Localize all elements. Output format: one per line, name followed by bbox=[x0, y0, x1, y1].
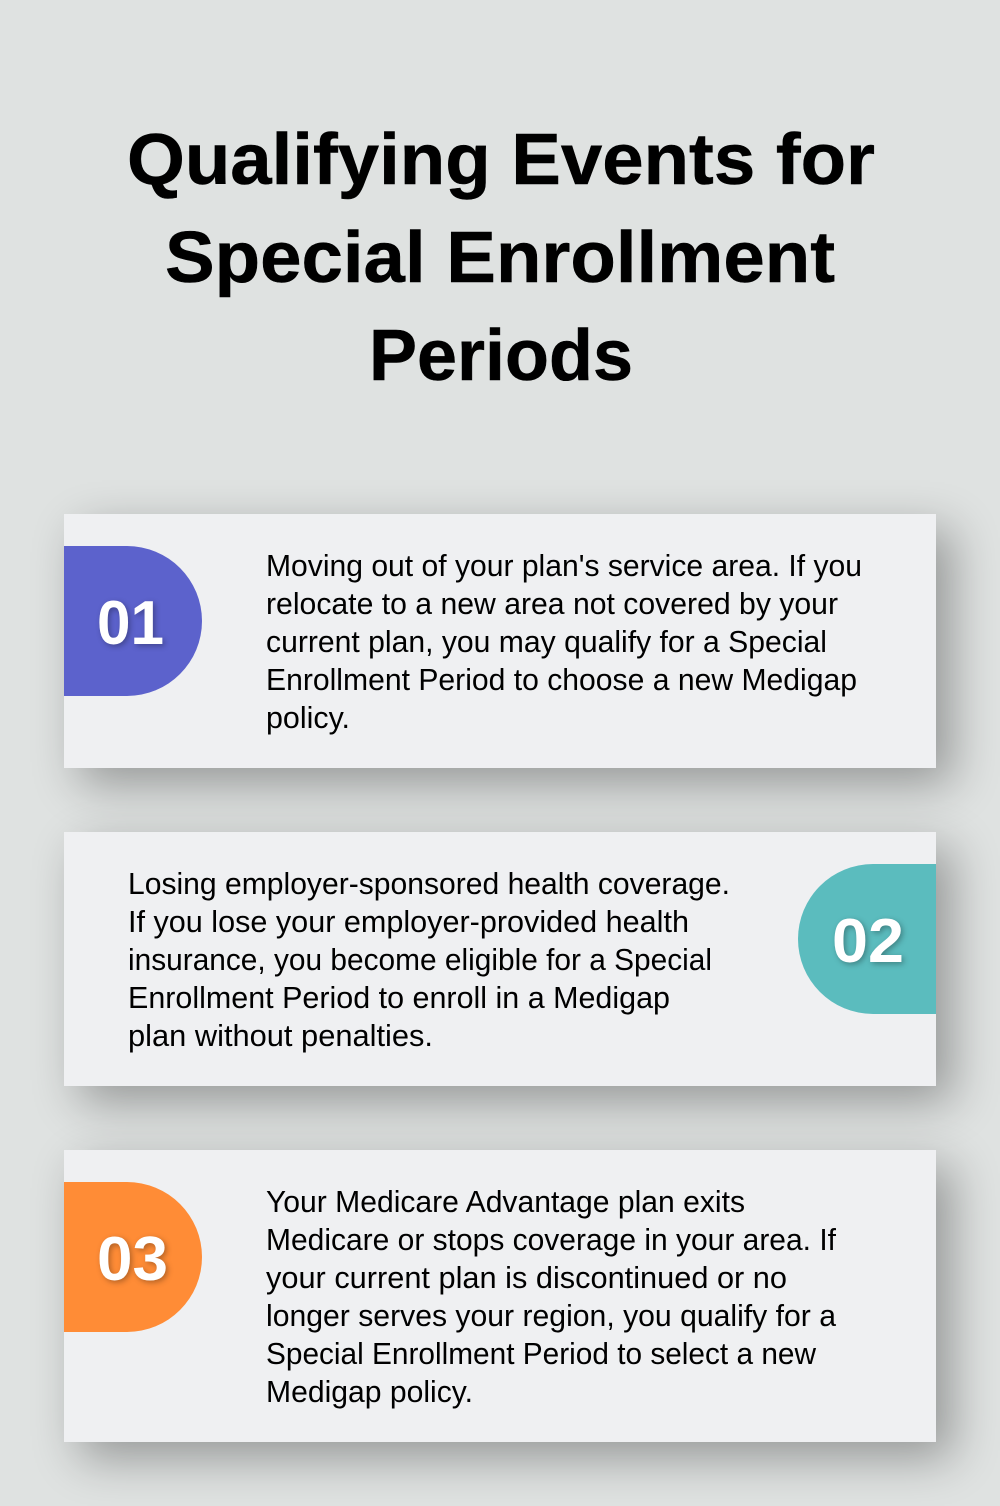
badge: 02 bbox=[798, 864, 936, 1014]
title: Special Enrollment bbox=[165, 218, 835, 298]
badge: 02: 02 bbox=[832, 907, 904, 976]
text: event 03 description: your current plan is discontinued or no bbox=[266, 1261, 787, 1295]
badge: 03 bbox=[64, 1182, 202, 1332]
text: event 01 description bbox=[266, 549, 862, 735]
text: event 01 description: Enrollment Period to choose a new Medigap bbox=[266, 663, 857, 697]
text: event 03 description: Medigap policy. bbox=[266, 1375, 473, 1409]
title: Periods bbox=[369, 316, 633, 396]
badge: 03: 03 bbox=[97, 1225, 168, 1294]
text: event 01 description: Moving out of your plan's service area. If you bbox=[266, 549, 862, 583]
text: event 01 description: relocate to a new area not covered by your bbox=[266, 587, 838, 621]
text: event 02 description: Enrollment Period to enroll in a Medigap bbox=[128, 981, 670, 1015]
text: event 02 description: insurance, you become eligible for a Special bbox=[128, 943, 712, 977]
text: event 02 description: plan without penalties. bbox=[128, 1019, 433, 1053]
text: event 01 description: policy. bbox=[266, 701, 350, 735]
panel: event 01 bbox=[64, 514, 936, 768]
title: Qualifying Events for bbox=[127, 120, 875, 200]
text: event 02 description: If you lose your employer-provided health bbox=[128, 905, 689, 939]
badge: 01 bbox=[64, 546, 202, 696]
text: event 03 description: longer serves your region, you qualify for a bbox=[266, 1299, 836, 1333]
panel: event 03 bbox=[64, 1150, 936, 1442]
badge: 01: 01 bbox=[97, 589, 164, 658]
text: event 03 description: Your Medicare Advantage plan exits bbox=[266, 1185, 745, 1219]
text: event 03 description bbox=[266, 1185, 837, 1409]
text: event 01 description: current plan, you may qualify for a Special bbox=[266, 625, 827, 659]
text: event 02 description bbox=[128, 867, 730, 1053]
text: event 02 description: Losing employer-sponsored health coverage. bbox=[128, 867, 730, 901]
text: event 03 description: Medicare or stops coverage in your area. If bbox=[266, 1223, 837, 1257]
title bbox=[127, 120, 875, 396]
text: event 03 description: Special Enrollment Period to select a new bbox=[266, 1337, 817, 1371]
panel: event 02 bbox=[64, 832, 936, 1086]
